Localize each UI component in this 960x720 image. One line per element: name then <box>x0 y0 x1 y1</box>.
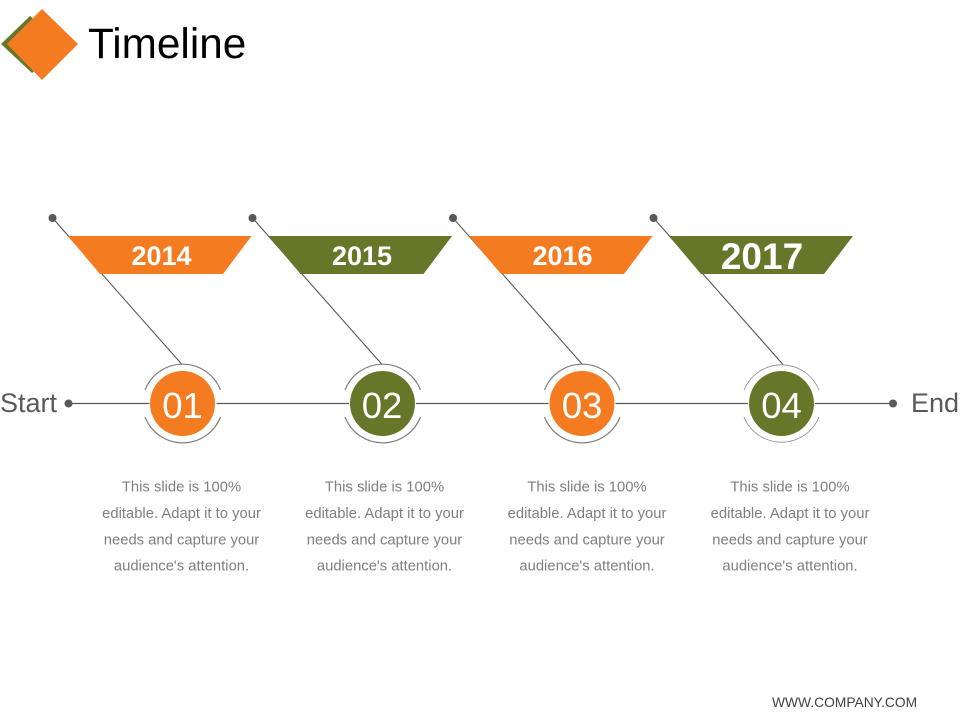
description 2017: This slide is 100% <box>730 480 850 496</box>
end label <box>889 388 959 418</box>
year banner 2015: 2015 <box>332 241 392 271</box>
node 02: 02 <box>362 385 402 426</box>
description 2014: This slide is 100% <box>122 480 241 496</box>
description 2017: audience's attention. <box>722 558 858 574</box>
description 2016: This slide is 100% <box>527 480 647 496</box>
description 2016 <box>508 480 666 574</box>
year banner 2016 <box>469 236 652 274</box>
end label: End <box>911 388 959 418</box>
connector 2017 <box>650 214 783 364</box>
description 2016: needs and capture your <box>509 532 665 548</box>
node 02 <box>345 364 420 443</box>
year banner 2014: 2014 <box>131 241 192 271</box>
icon: title diamonds <box>1 9 78 80</box>
description 2014: audience's attention. <box>114 558 249 574</box>
description 2015: needs and capture your <box>307 532 462 548</box>
year banner 2017: 2017 <box>721 236 803 277</box>
description 2015: editable. Adapt it to your <box>305 506 464 522</box>
milestone 2015 <box>248 214 464 574</box>
description 2016: editable. Adapt it to your <box>508 506 666 522</box>
description 2015: This slide is 100% <box>325 480 444 496</box>
start label: Start <box>0 388 58 418</box>
milestone 2016 <box>449 214 666 574</box>
milestone 2017 <box>650 214 869 574</box>
connector 2014 <box>48 214 182 364</box>
year banner 2014 <box>68 236 252 274</box>
connector 2016 <box>449 214 582 364</box>
description 2015 <box>305 480 464 574</box>
connector 2015 <box>248 214 382 364</box>
node 03: 03 <box>562 385 602 426</box>
node 04: 04 <box>761 385 802 426</box>
footer website: WWW.COMPANY.COM <box>772 695 917 710</box>
description 2014: needs and capture your <box>104 532 259 548</box>
title: Timeline <box>88 20 246 67</box>
description 2014 <box>102 480 261 574</box>
node 03 <box>544 364 620 443</box>
milestone 2014 <box>48 214 261 574</box>
description 2015: audience's attention. <box>317 558 452 574</box>
description 2016: audience's attention. <box>519 558 655 574</box>
node 01: 01 <box>162 385 203 426</box>
year banner 2017 <box>669 236 853 277</box>
description 2017: needs and capture your <box>712 532 868 548</box>
description 2014: editable. Adapt it to your <box>102 506 261 522</box>
node 01 <box>145 364 220 443</box>
year banner 2016: 2016 <box>532 241 593 271</box>
description 2017 <box>711 480 869 574</box>
year banner 2015 <box>268 236 452 274</box>
main timeline axis <box>69 402 893 404</box>
node 04 <box>744 365 819 442</box>
description 2017: editable. Adapt it to your <box>711 506 869 522</box>
